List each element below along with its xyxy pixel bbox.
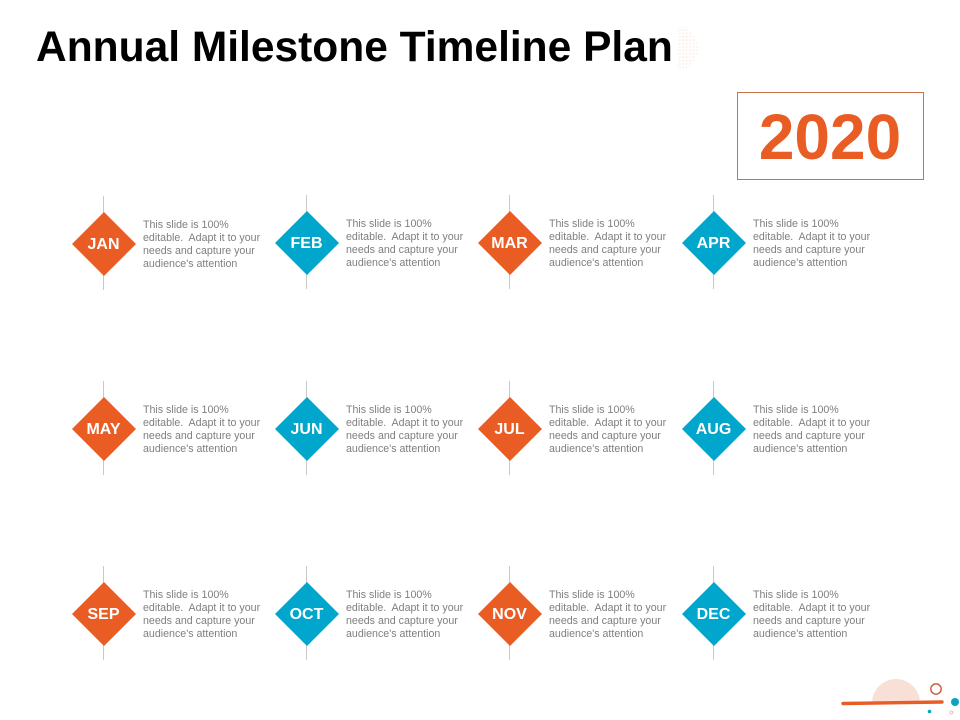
milestone: OCT: editable. Adapt it to your [346, 602, 463, 614]
milestone: JUL [478, 381, 666, 475]
milestone: SEP: SEP [87, 606, 120, 623]
milestone: MAY: needs and capture your [143, 430, 255, 442]
milestone: JUN: This slide is 100% [346, 404, 432, 416]
milestone: NOV: audience's attention [549, 628, 643, 640]
milestone: JUN: JUN [290, 421, 322, 438]
milestone: DEC: This slide is 100% [753, 589, 839, 601]
milestone: AUG [682, 381, 870, 475]
milestone: AUG: AUG [696, 421, 731, 438]
year box [737, 92, 924, 180]
milestone: JUL: needs and capture your [549, 430, 661, 442]
milestone: APR: APR [697, 235, 730, 252]
milestone: MAY: audience's attention [143, 443, 237, 455]
milestone: FEB [275, 195, 463, 289]
milestone: APR [682, 195, 870, 289]
milestone: JAN: JAN [87, 236, 120, 253]
milestone: DEC: DEC [697, 606, 730, 623]
milestone: SEP: needs and capture your [143, 615, 255, 627]
milestone: MAY [72, 381, 260, 475]
milestone: MAR: needs and capture your [549, 244, 661, 256]
milestone: NOV [478, 566, 666, 660]
milestone: FEB: editable. Adapt it to your [346, 231, 463, 243]
year box: 2020 [759, 101, 901, 173]
milestone: MAY: This slide is 100% [143, 404, 229, 416]
milestone: JUN: editable. Adapt it to your [346, 417, 463, 429]
milestone: AUG: needs and capture your [753, 430, 865, 442]
milestone: AUG: editable. Adapt it to your [753, 417, 870, 429]
milestone: APR: needs and capture your [753, 244, 865, 256]
milestone: MAY: MAY [86, 421, 121, 438]
footer decoration [841, 679, 959, 714]
milestone: MAY: editable. Adapt it to your [143, 417, 260, 429]
milestone: NOV: This slide is 100% [549, 589, 635, 601]
milestone: JAN: This slide is 100% [143, 219, 229, 231]
milestone: JAN [72, 196, 260, 290]
milestone: JUN: needs and capture your [346, 430, 458, 442]
milestone: OCT: This slide is 100% [346, 589, 432, 601]
milestone: SEP: This slide is 100% [143, 589, 229, 601]
title: Annual Milestone Timeline Plan [36, 24, 673, 71]
milestone: DEC: needs and capture your [753, 615, 865, 627]
milestone: SEP [72, 566, 260, 660]
milestone: APR: This slide is 100% [753, 218, 839, 230]
milestone: JUN [275, 381, 463, 475]
milestone: JUL: editable. Adapt it to your [549, 417, 666, 429]
milestone: JUL: audience's attention [549, 443, 643, 455]
milestone: FEB: This slide is 100% [346, 218, 432, 230]
milestone: JUL: JUL [494, 421, 525, 438]
milestone: JAN: audience's attention [143, 258, 237, 270]
milestone: OCT [275, 566, 463, 660]
milestone: NOV: NOV [492, 606, 527, 623]
milestone: FEB: FEB [290, 235, 322, 252]
milestone: FEB: audience's attention [346, 257, 440, 269]
icon: dotted arrow [677, 27, 700, 70]
milestone: DEC: audience's attention [753, 628, 847, 640]
milestone: JUL: This slide is 100% [549, 404, 635, 416]
milestone: OCT: OCT [290, 606, 323, 623]
milestone: APR: audience's attention [753, 257, 847, 269]
milestone: AUG: This slide is 100% [753, 404, 839, 416]
milestone: MAR: This slide is 100% [549, 218, 635, 230]
milestone: JAN: editable. Adapt it to your [143, 232, 260, 244]
milestone: DEC [682, 566, 870, 660]
milestone: OCT: needs and capture your [346, 615, 458, 627]
milestone: MAR [478, 195, 666, 289]
milestone: SEP: editable. Adapt it to your [143, 602, 260, 614]
milestone: MAR: audience's attention [549, 257, 643, 269]
milestone: APR: editable. Adapt it to your [753, 231, 870, 243]
milestone: JUN: audience's attention [346, 443, 440, 455]
milestone: DEC: editable. Adapt it to your [753, 602, 870, 614]
milestone: MAR: MAR [491, 235, 528, 252]
milestone: NOV: editable. Adapt it to your [549, 602, 666, 614]
milestone: NOV: needs and capture your [549, 615, 661, 627]
milestone: MAR: editable. Adapt it to your [549, 231, 666, 243]
milestone: JAN: needs and capture your [143, 245, 255, 257]
milestone: OCT: audience's attention [346, 628, 440, 640]
milestone: SEP: audience's attention [143, 628, 237, 640]
milestone: AUG: audience's attention [753, 443, 847, 455]
milestone: FEB: needs and capture your [346, 244, 458, 256]
